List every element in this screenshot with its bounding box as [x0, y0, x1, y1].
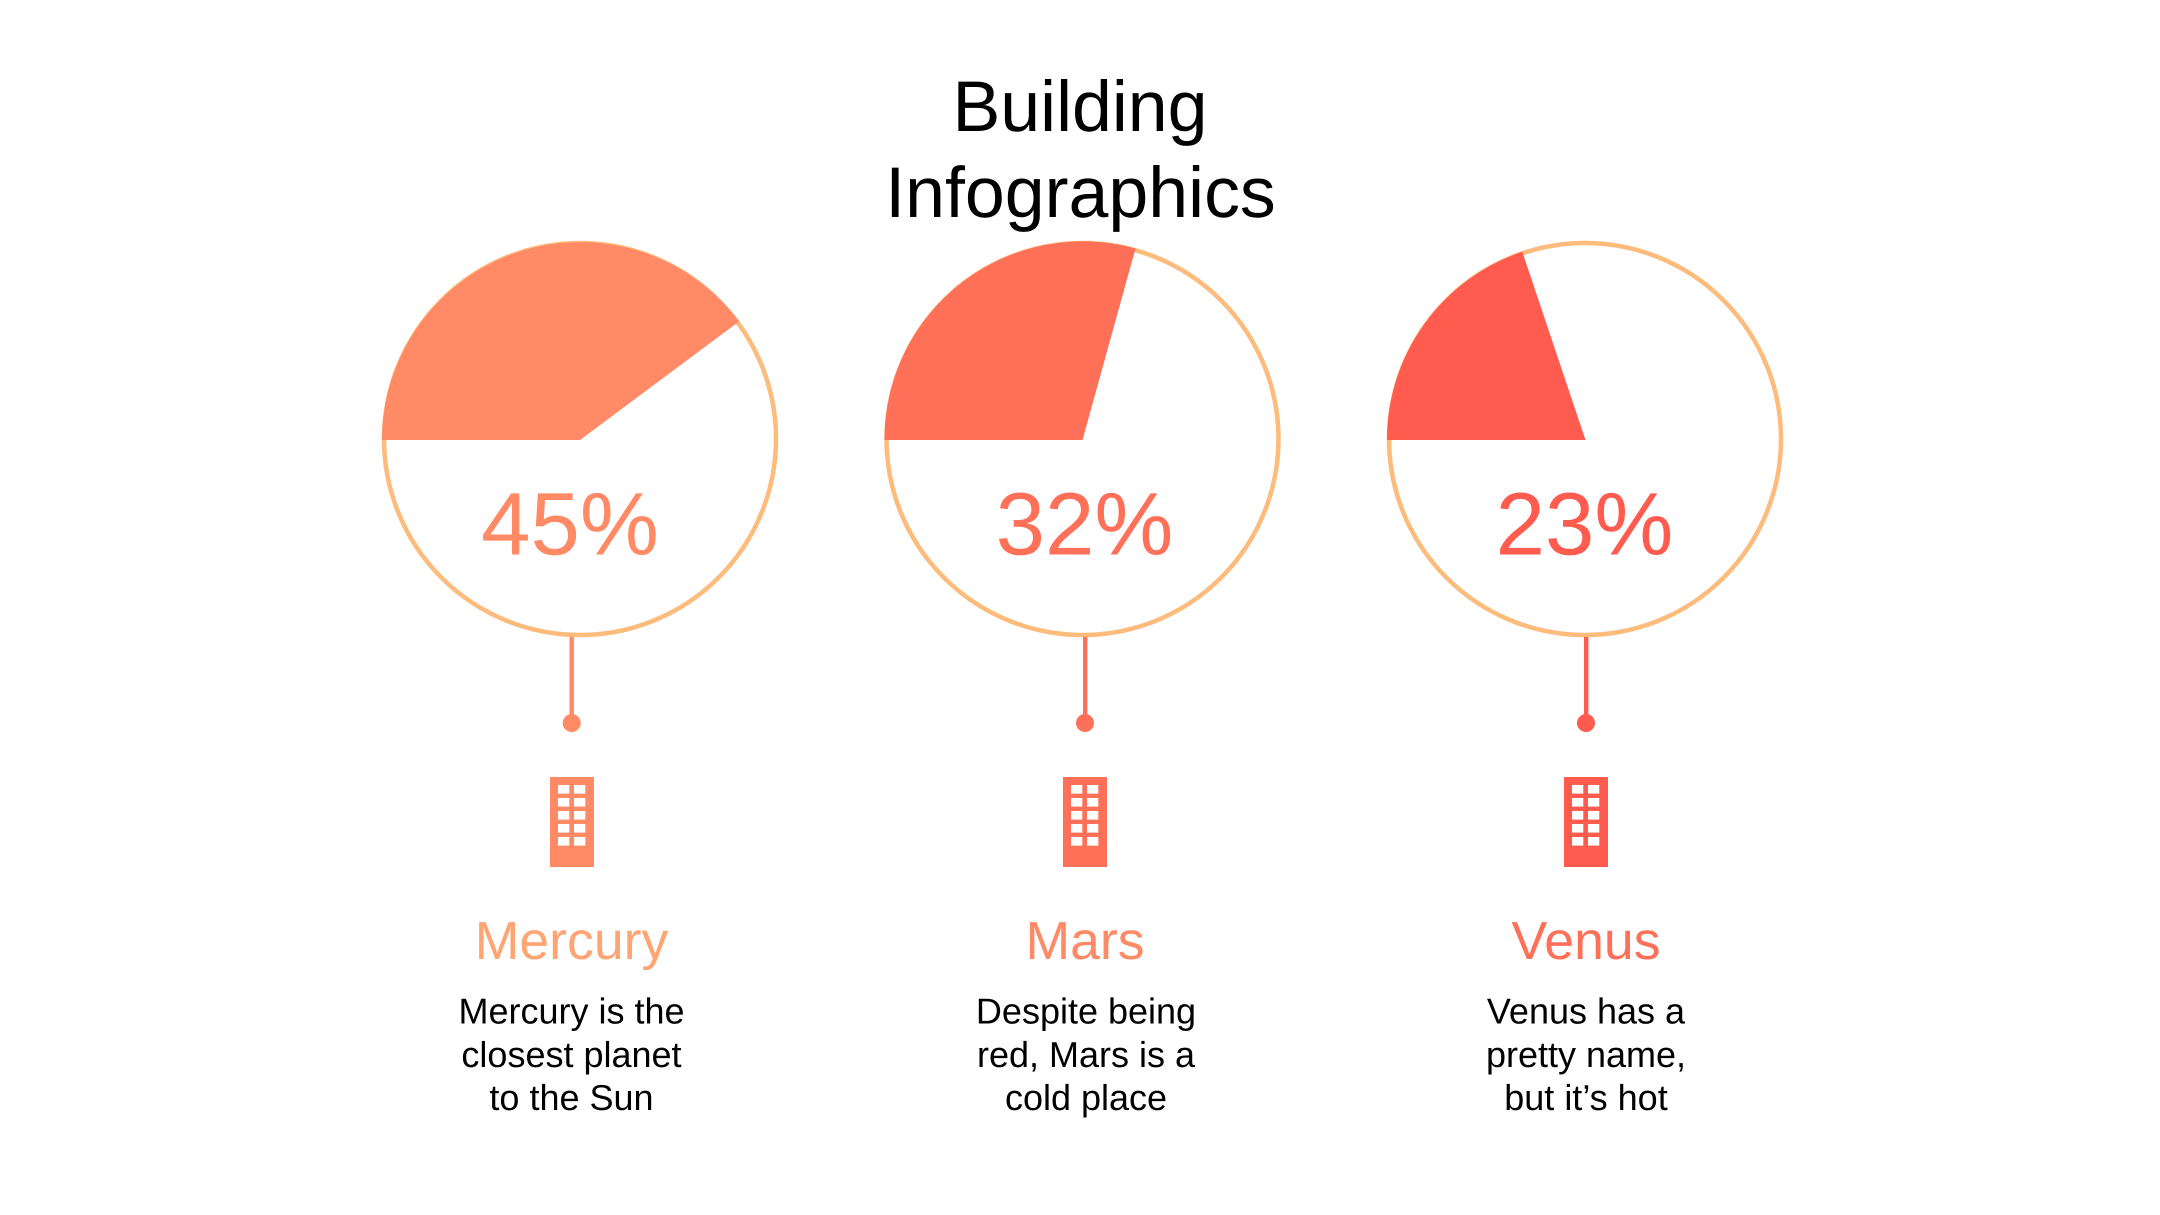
icon: building — [550, 777, 594, 867]
text block: Mercury description: closest planet — [461, 1034, 682, 1075]
pie chart: Mars 32% — [884, 241, 1278, 635]
connector line and dot — [563, 637, 581, 732]
icon: building — [1564, 777, 1608, 867]
text block: Venus description: but it’s hot — [1504, 1077, 1668, 1118]
title — [885, 67, 1276, 233]
text block: Venus description: Venus has a — [1487, 991, 1686, 1032]
icon: building — [1063, 777, 1107, 867]
text block: Mars description — [976, 991, 1196, 1118]
text block: Mercury description: Mercury is the — [458, 991, 685, 1032]
percentage: 23%: 23% — [1496, 474, 1673, 574]
panel: Mercury — [382, 242, 776, 1118]
text block: Mars description: cold place — [1005, 1077, 1167, 1118]
panel: Mars — [884, 241, 1278, 1118]
text block: Mars description: Despite being — [976, 991, 1196, 1032]
text block: Venus description — [1486, 991, 1686, 1118]
text block: Venus description: pretty name, — [1486, 1034, 1686, 1075]
connector line and dot — [1076, 637, 1094, 732]
panel: Venus — [1387, 243, 1781, 1118]
heading: Mars: Mars — [1025, 911, 1145, 971]
title: Building — [952, 67, 1208, 147]
pie chart: Venus 23% — [1387, 243, 1781, 635]
text block: Mercury description — [458, 991, 685, 1118]
heading: Mercury: Mercury — [475, 911, 668, 971]
title: Infographics — [885, 153, 1276, 233]
percentage: 32%: 32% — [996, 474, 1173, 574]
text block: Mars description: red, Mars is a — [977, 1034, 1196, 1075]
connector line and dot — [1577, 637, 1595, 732]
percentage: 45%: 45% — [481, 474, 659, 574]
pie chart: Mercury 45% — [382, 242, 776, 635]
text block: Mercury description: to the Sun — [489, 1077, 654, 1118]
heading: Venus: Venus — [1511, 911, 1661, 971]
